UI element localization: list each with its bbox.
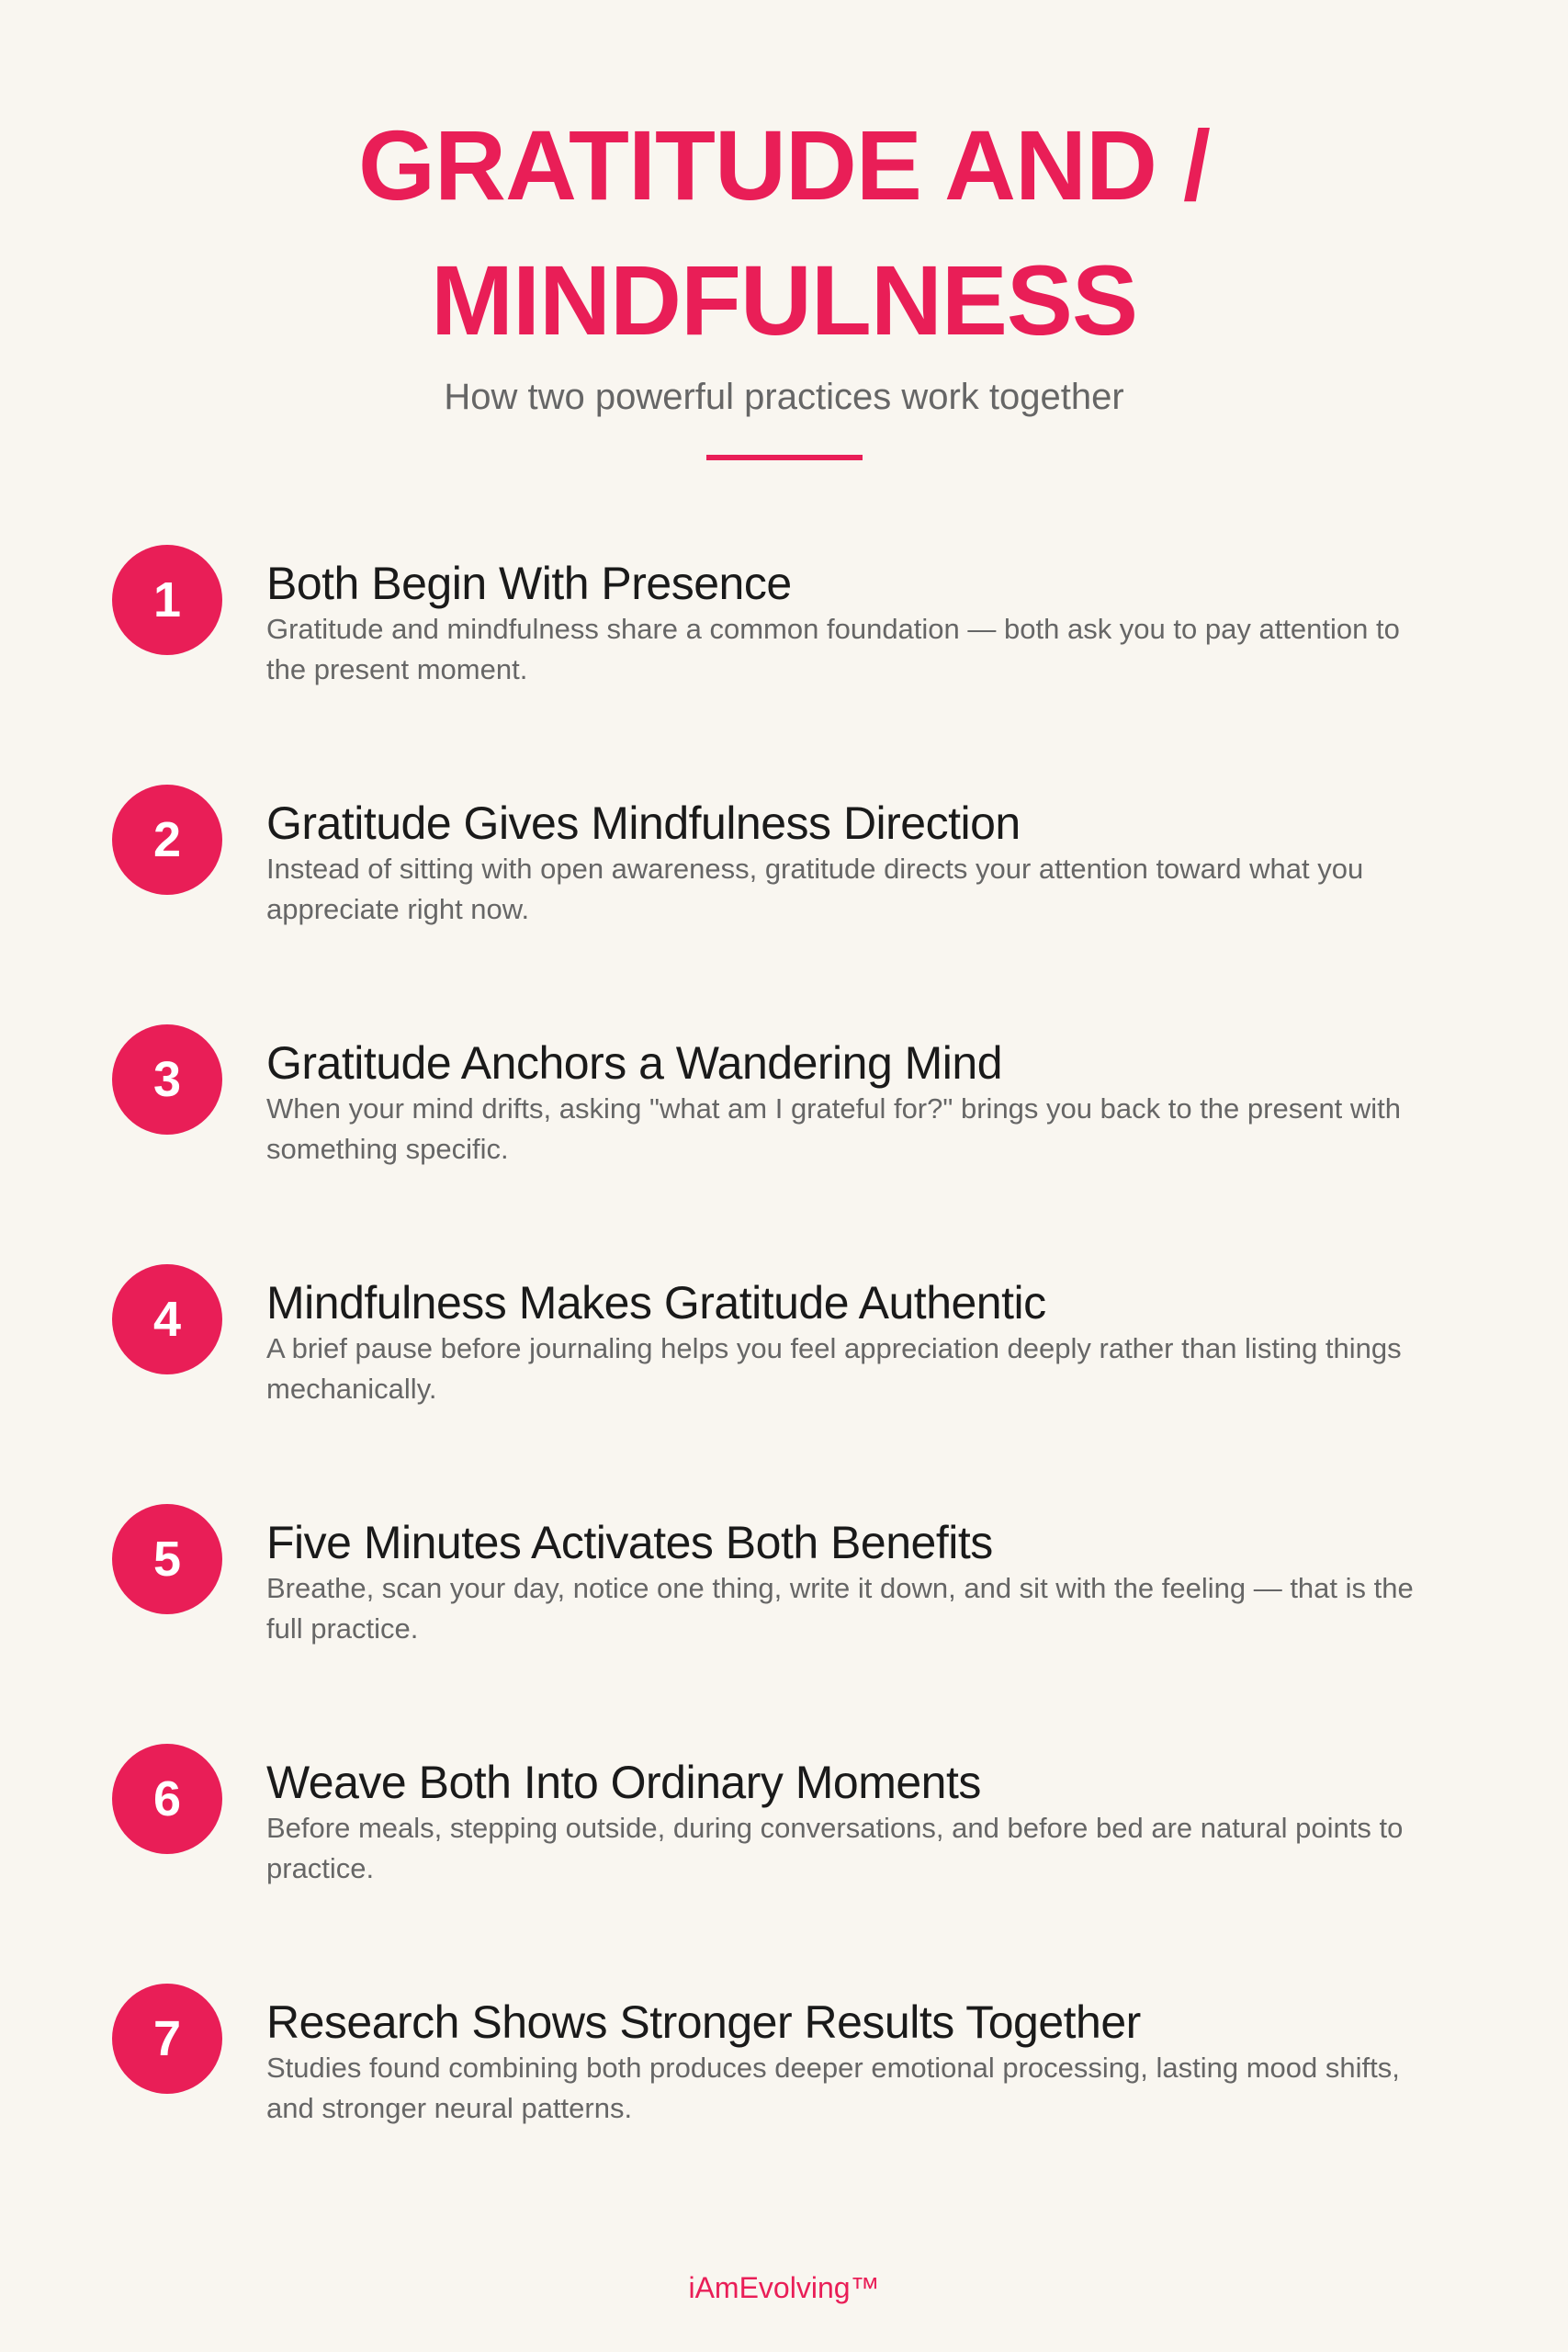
footer: iAmEvolving™ <box>688 2271 880 2304</box>
item 7: Research Shows Stronger Results Together <box>266 1996 1141 2048</box>
item 4: Mindfulness Makes Gratitude Authentic <box>266 1277 1046 1329</box>
subtitle: How two powerful practices work together <box>444 377 1124 417</box>
item 4: 4 <box>153 1292 181 1347</box>
item 2: 2 <box>153 812 181 867</box>
item 5: Breathe, scan your day, notice one thing, write it down, and sit with the feeling — that is the full practice. <box>266 1572 1414 1645</box>
item 3: 3 <box>153 1052 181 1107</box>
item 1: Gratitude and mindfulness share a common foundation — both ask you to pay attention to the present moment. <box>266 613 1400 685</box>
item 6: 6 <box>153 1771 181 1826</box>
item 7: 7 <box>153 2011 181 2066</box>
item 1 <box>112 545 1400 685</box>
item 2: Instead of sitting with open awareness, gratitude directs your attention toward what you appreciate right now. <box>266 853 1363 925</box>
item 6: Weave Both Into Ordinary Moments <box>266 1757 981 1808</box>
item 2 <box>112 785 1363 925</box>
item 4 <box>112 1264 1402 1405</box>
item 1: 1 <box>153 572 181 628</box>
divider <box>706 455 863 460</box>
title: GRATITUDE AND / <box>358 109 1210 220</box>
title: MINDFULNESS <box>431 244 1137 356</box>
item 2: Gratitude Gives Mindfulness Direction <box>266 797 1021 849</box>
item 3: Gratitude Anchors a Wandering Mind <box>266 1037 1002 1089</box>
item 7: Studies found combining both produces deeper emotional processing, lasting mood shifts, and stronger neural patterns. <box>266 2052 1400 2124</box>
item 3: When your mind drifts, asking "what am I grateful for?" brings you back to the present with something specific. <box>266 1092 1401 1165</box>
item 6 <box>112 1744 1403 1884</box>
title <box>358 109 1210 356</box>
item 1: Both Begin With Presence <box>266 558 792 609</box>
item 6: Before meals, stepping outside, during conversations, and before bed are natural points to practice. <box>266 1812 1403 1884</box>
item 3 <box>112 1024 1401 1165</box>
item 7 <box>112 1984 1400 2124</box>
item 5: 5 <box>153 1532 181 1587</box>
item 5: Five Minutes Activates Both Benefits <box>266 1517 993 1568</box>
item 4: A brief pause before journaling helps you feel appreciation deeply rather than listing things mechanically. <box>266 1332 1402 1405</box>
item 5 <box>112 1504 1414 1645</box>
